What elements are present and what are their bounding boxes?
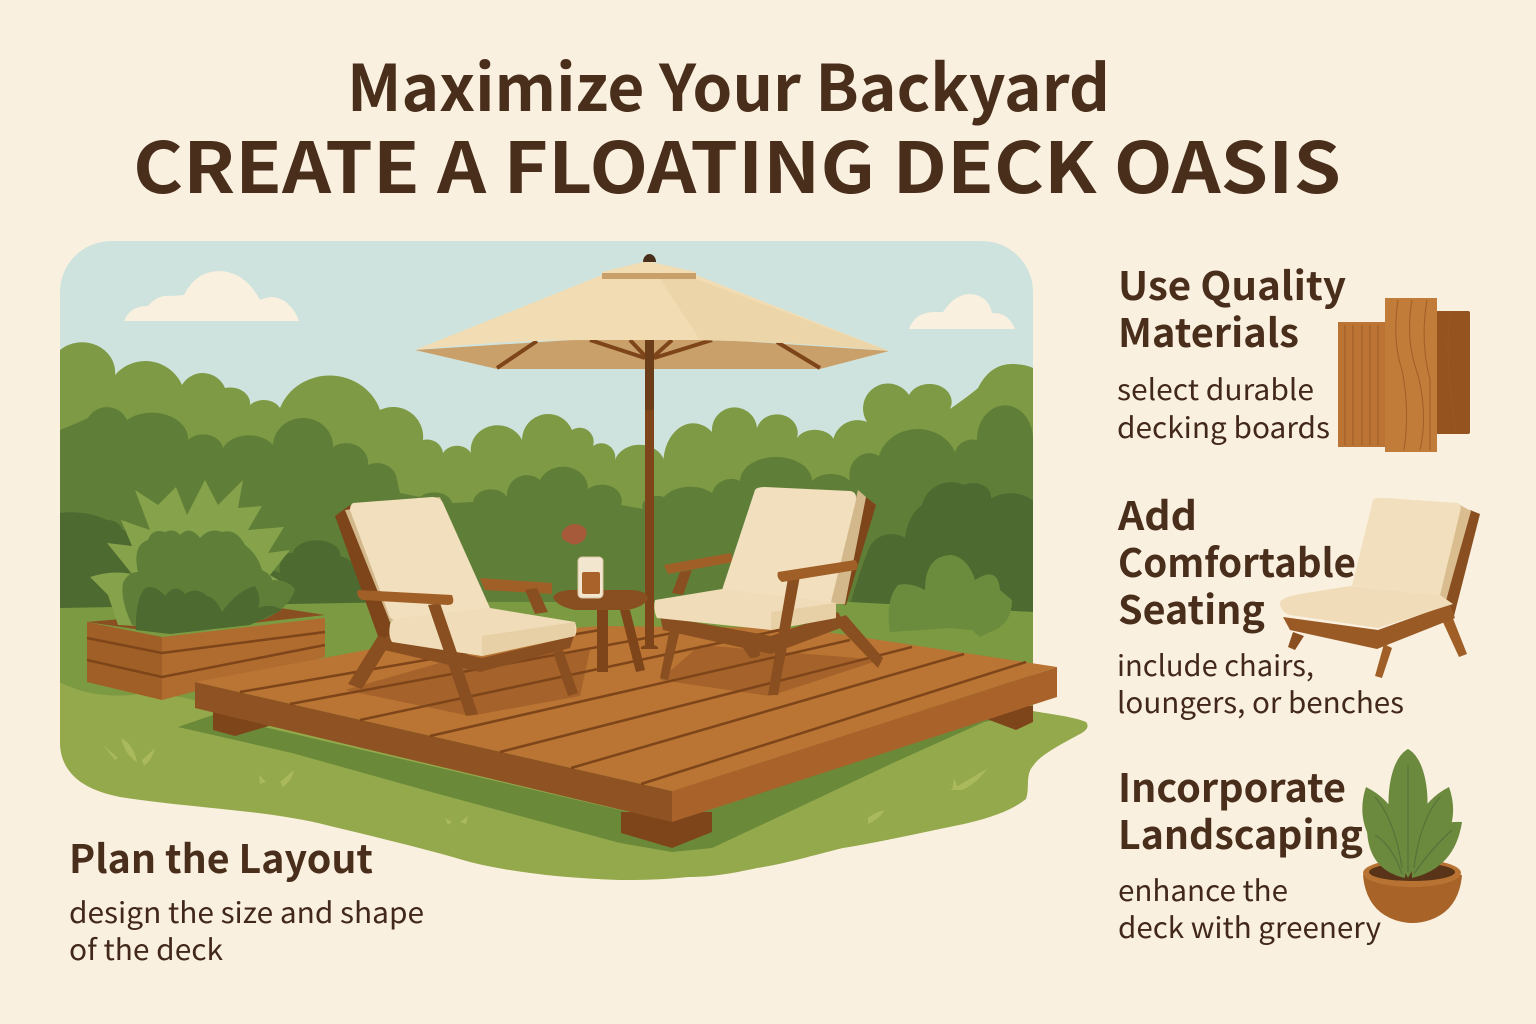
text: use quality materials: select durable xyxy=(1117,367,1314,409)
planter bush xyxy=(90,480,295,634)
text: add comfortable seating: loungers, or benches xyxy=(1117,680,1404,722)
title: CREATE A FLOATING DECK OASIS xyxy=(133,113,1341,214)
text: incorporate landscaping: Landscaping xyxy=(1118,805,1363,861)
deck plank lines xyxy=(240,628,1026,784)
text: incorporate landscaping: Incorporate xyxy=(1118,758,1346,814)
dark trees right xyxy=(850,482,1033,612)
deck top xyxy=(195,626,1057,791)
text: use quality materials: decking boards xyxy=(1117,405,1330,447)
text: add comfortable seating: Comfortable xyxy=(1118,533,1356,589)
illustration: backyard scene xyxy=(60,241,1480,969)
title: Maximize Your Backyard xyxy=(347,38,1110,130)
dark trees left xyxy=(60,512,372,610)
grass tufts xyxy=(103,738,988,825)
text: add comfortable seating xyxy=(1117,486,1404,722)
icon: lounge chair xyxy=(1280,498,1480,678)
text: use quality materials: Materials xyxy=(1118,303,1299,359)
text: plan the layout xyxy=(69,829,424,969)
text: add comfortable seating: Seating xyxy=(1118,580,1265,636)
umbrella xyxy=(415,254,889,649)
text: add comfortable seating: Add xyxy=(1117,486,1197,542)
vase with flower xyxy=(562,524,603,598)
text: plan the layout: design the size and shape xyxy=(69,890,424,932)
deck feet xyxy=(213,712,272,736)
text: use quality materials: Use Quality xyxy=(1118,256,1346,312)
sky xyxy=(60,241,1033,460)
grass band xyxy=(60,602,1033,712)
deck left face xyxy=(195,682,672,822)
title xyxy=(133,38,1341,214)
chair shadows xyxy=(345,650,590,716)
finial xyxy=(643,254,656,262)
ribs xyxy=(497,340,820,368)
ground xyxy=(60,600,1088,880)
pole xyxy=(645,340,654,410)
icon: wood boards xyxy=(1338,298,1470,452)
canopy underside xyxy=(415,335,889,369)
side table xyxy=(553,590,648,672)
cloud left xyxy=(124,271,299,321)
canopy cap xyxy=(602,261,696,279)
text: incorporate landscaping: deck with greenery xyxy=(1118,905,1381,947)
text: use quality materials xyxy=(1117,256,1346,447)
planter box xyxy=(87,618,325,700)
deck xyxy=(195,626,1057,848)
cloud right xyxy=(909,294,1015,329)
middle trees xyxy=(60,405,1033,620)
right chair xyxy=(654,487,883,695)
text: plan the layout: Plan the Layout xyxy=(69,829,373,885)
canopy top xyxy=(415,275,889,351)
deck right face xyxy=(672,667,1057,822)
left chair xyxy=(335,497,578,716)
text: incorporate landscaping: enhance the xyxy=(1118,868,1288,910)
grass shadow under deck xyxy=(178,700,1033,852)
text: incorporate landscaping xyxy=(1118,758,1381,947)
text: plan the layout: of the deck xyxy=(69,927,223,969)
icon: potted plant xyxy=(1362,749,1462,923)
planter back rim xyxy=(87,608,325,633)
text: add comfortable seating: include chairs, xyxy=(1117,643,1314,685)
front right bush xyxy=(889,555,1012,637)
back trees xyxy=(60,342,1033,509)
sky with clouds and trees xyxy=(60,241,1033,712)
mid grass xyxy=(60,608,1033,712)
